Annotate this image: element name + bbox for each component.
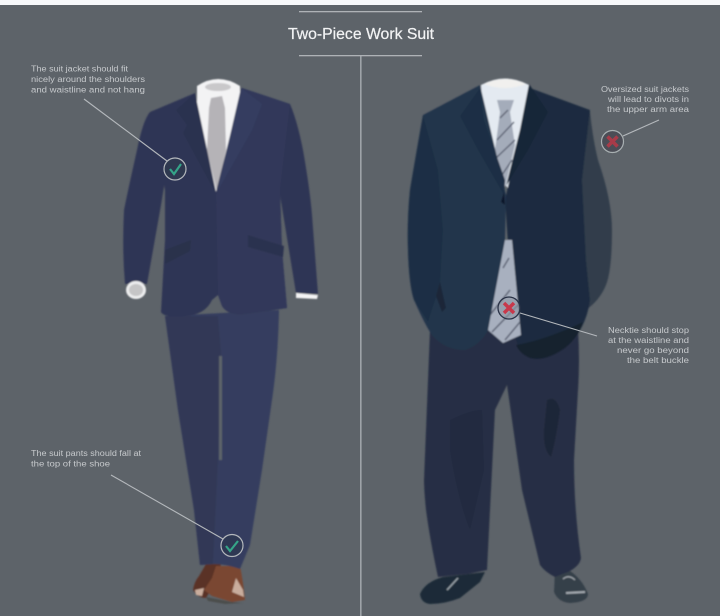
icon: cross — [602, 130, 624, 152]
callout: oversized jacket: the upper arm area — [607, 105, 690, 114]
callout: jacket fit — [31, 64, 186, 180]
pants — [165, 310, 279, 569]
callout: necktie length: the belt buckle — [627, 356, 689, 365]
callout: jacket fit: The suit jacket should fit — [31, 64, 129, 74]
title: Two-Piece Work Suit — [288, 26, 435, 43]
callout: pants length: the top of the shoe — [31, 460, 110, 468]
callout: necktie length — [498, 297, 690, 365]
illustration: well-fitted suit — [123, 79, 318, 604]
callout: jacket fit: and waistline and not hang — [31, 86, 145, 94]
lapels — [460, 88, 505, 195]
callout: necktie length: never go beyond — [617, 346, 689, 355]
shirt — [197, 79, 240, 195]
pants — [424, 330, 581, 577]
jacket body — [150, 88, 290, 316]
necktie — [207, 96, 226, 192]
hand pocket — [436, 282, 446, 312]
necktie top — [495, 100, 515, 187]
icon: check — [221, 534, 243, 556]
callout: jacket fit: nicely around the shoulders — [31, 75, 145, 84]
icon: check — [164, 158, 186, 180]
callout: oversized jacket: Oversized suit jackets — [601, 85, 689, 94]
necktie bottom — [488, 240, 521, 343]
lapels — [176, 93, 215, 192]
jacket right — [505, 88, 590, 359]
pockets — [165, 240, 191, 264]
shoes black — [420, 569, 588, 604]
cuffs — [126, 281, 146, 299]
sleeve: right arm — [570, 105, 612, 310]
shirt — [481, 78, 529, 190]
illustration: oversized suit — [408, 78, 612, 604]
sleeves — [123, 112, 170, 284]
callout: necktie length: at the waistline and — [608, 336, 689, 345]
jacket left — [408, 85, 506, 350]
callout: oversized jacket — [601, 85, 690, 152]
callout: necktie length: Necktie should stop — [608, 326, 690, 335]
callout: pants length: The suit pants should fall at — [31, 449, 142, 458]
shoes brown — [193, 564, 245, 604]
jacket left sleeve — [408, 115, 443, 322]
icon: cross — [498, 297, 520, 319]
callout: oversized jacket: will lead to divots in — [607, 95, 689, 104]
callout: pants length — [31, 449, 243, 556]
